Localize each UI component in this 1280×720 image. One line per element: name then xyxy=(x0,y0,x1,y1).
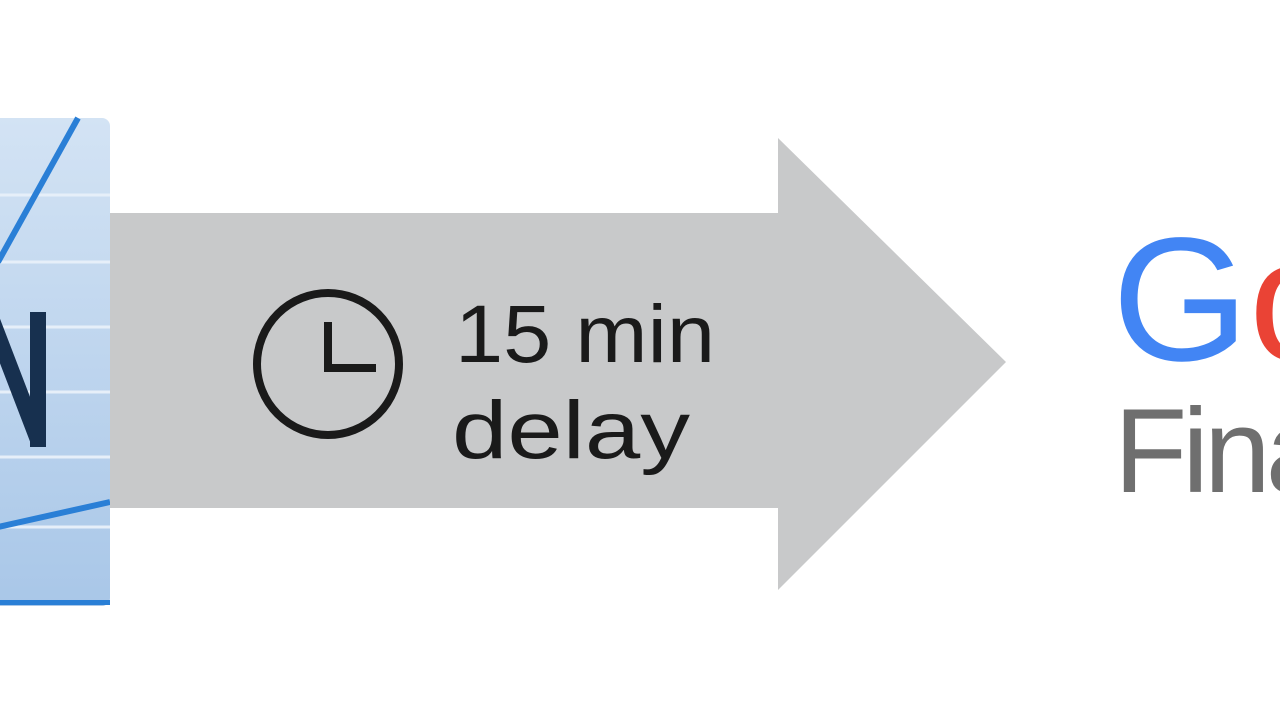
arrow: delay xyxy=(452,385,690,476)
logo: Google Finance xyxy=(1112,202,1280,518)
icon: clock xyxy=(257,293,399,435)
text: 15 min delay: 15 min xyxy=(455,289,715,380)
arrow xyxy=(110,138,1006,590)
panel: stock chart card xyxy=(0,118,110,606)
letter N xyxy=(0,312,38,447)
